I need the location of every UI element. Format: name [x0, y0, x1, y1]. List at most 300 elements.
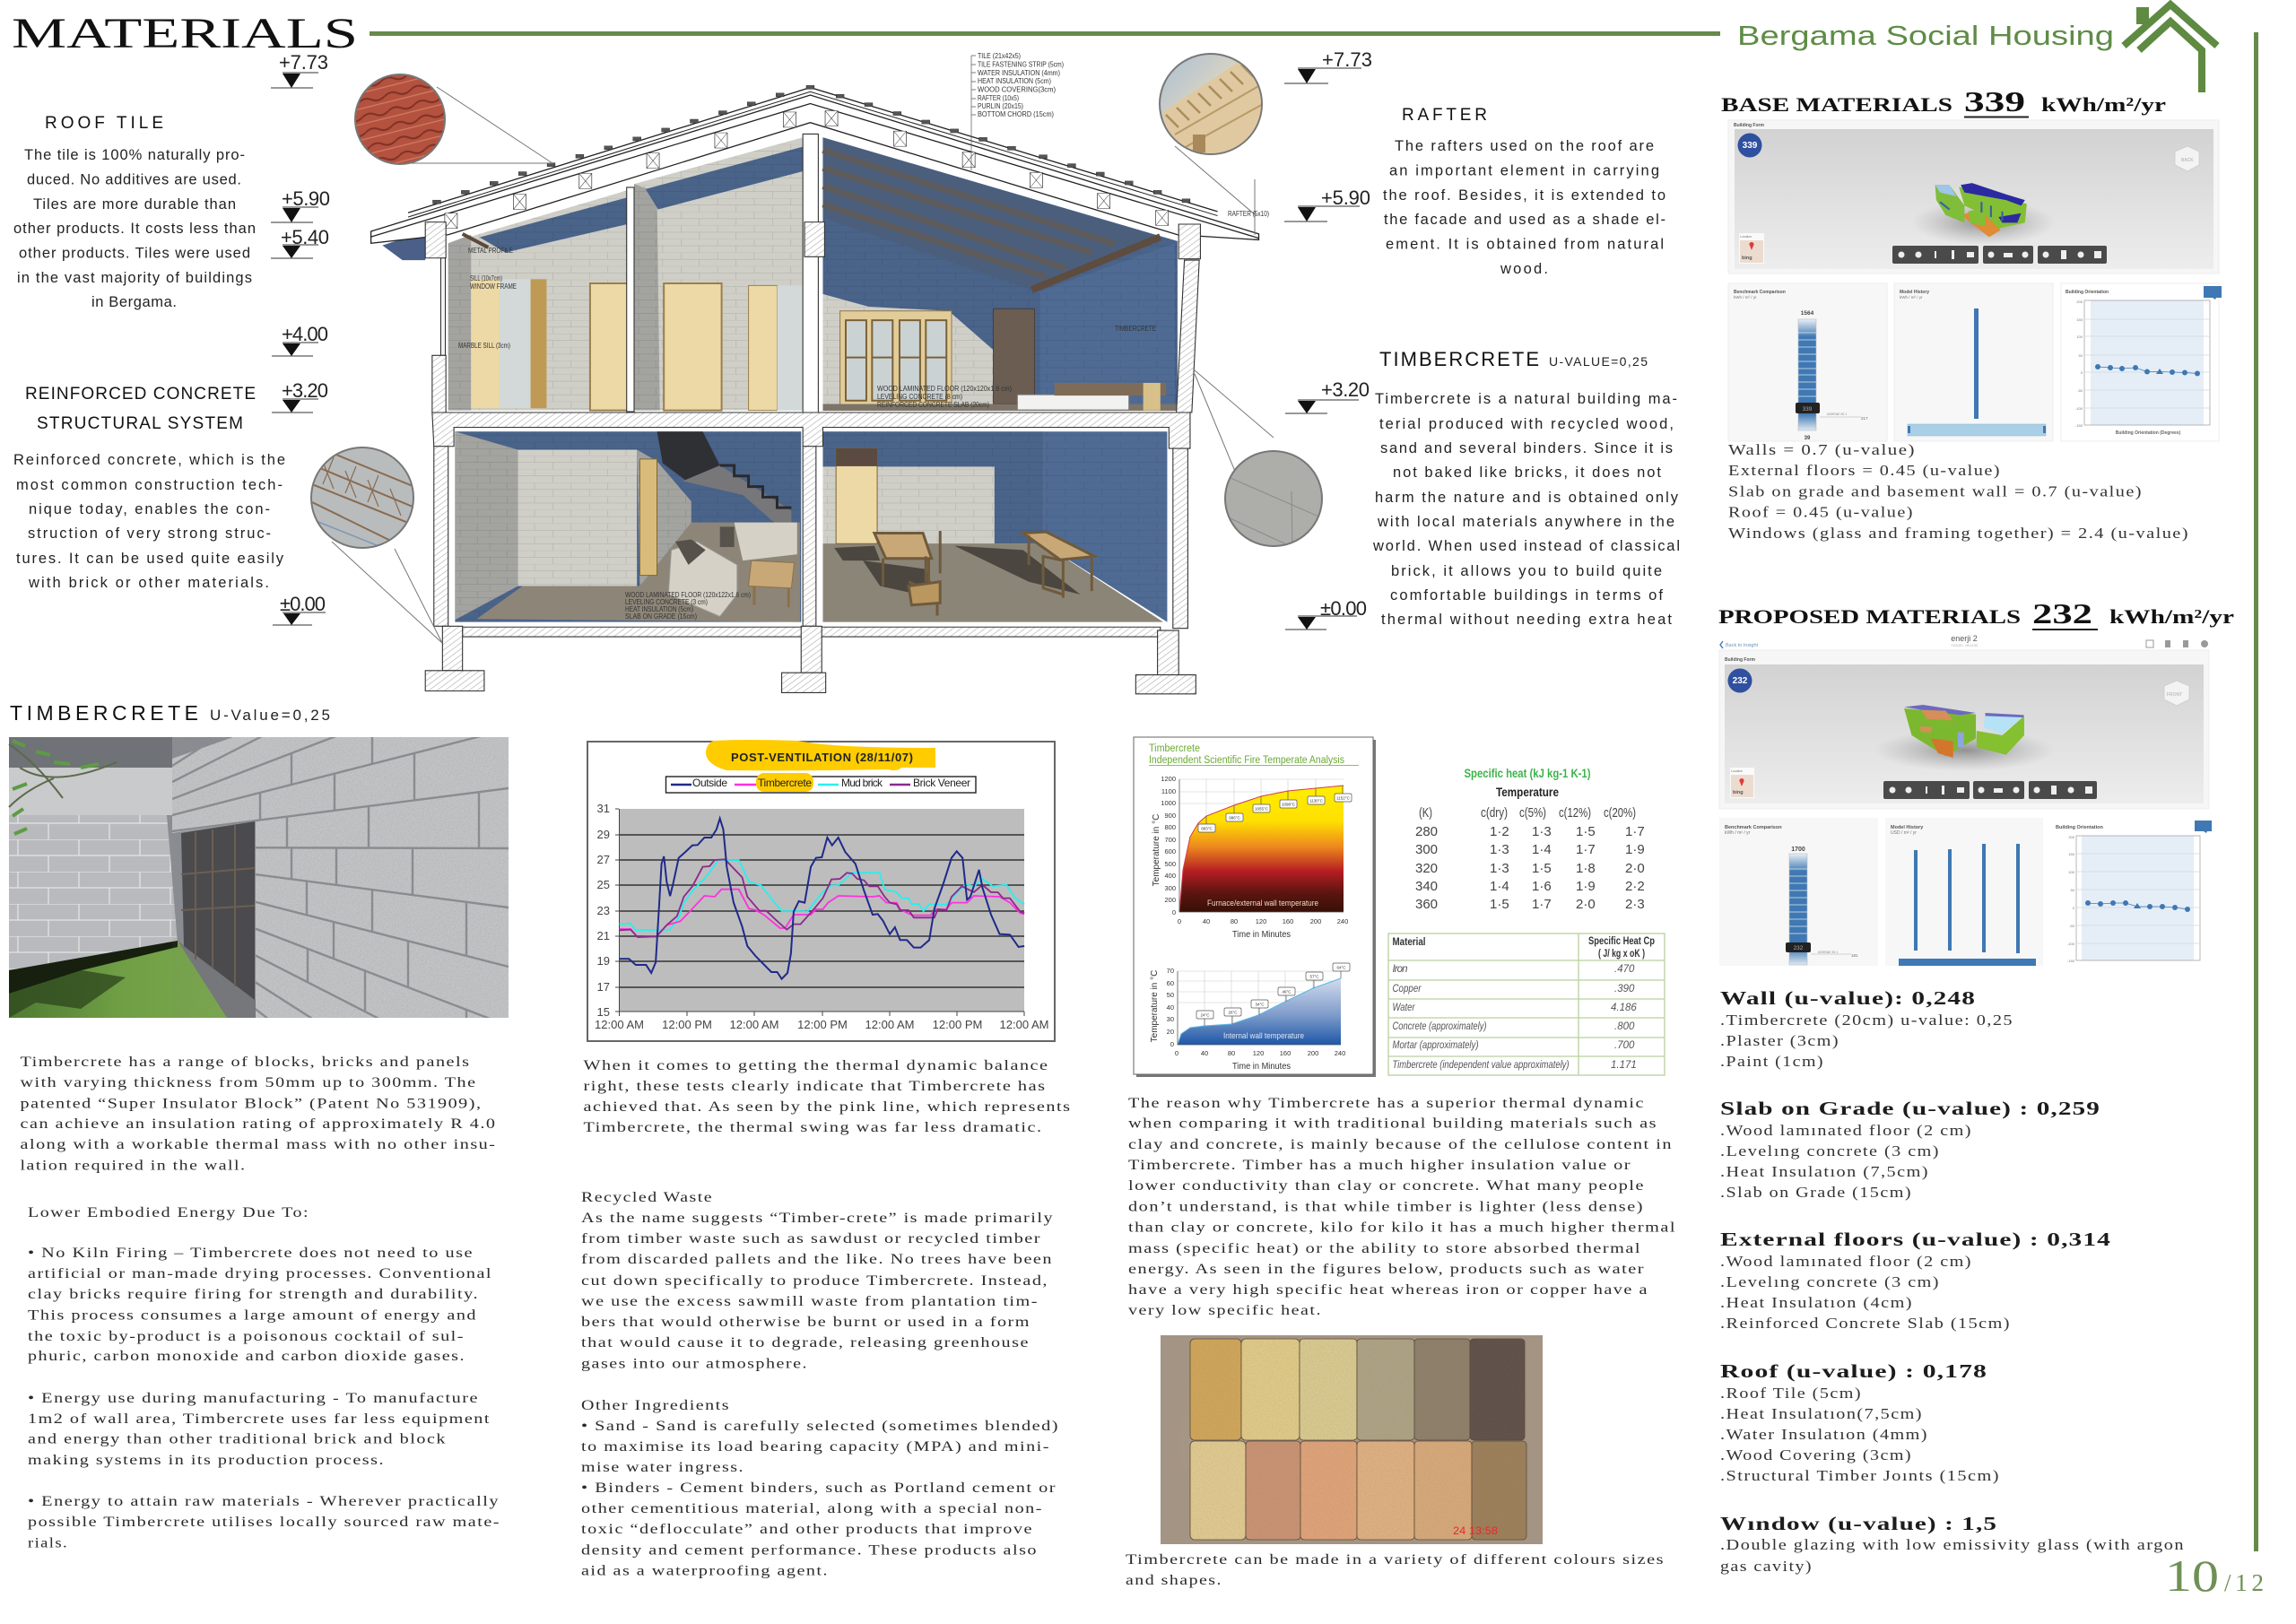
window notes: [458, 247, 517, 350]
chart: furnace temperature: 800: [1164, 823, 1176, 831]
level +5.90 right: [1284, 187, 1370, 221]
location map: Location: [1740, 235, 1752, 239]
chart: internal wall temperature: 240: [1335, 1049, 1345, 1057]
text block: why timbercrete has superior thermal dynamic: [1128, 1096, 1676, 1318]
table: specific heat by temperature: 1·3: [1490, 861, 1509, 876]
timbercrete note: TIMBERCRETE: [1115, 325, 1156, 333]
spec: window: gas cavity): [1720, 1558, 1813, 1575]
text block: rafter: an important element in carrying: [1389, 163, 1659, 179]
table: specific heat by temperature: 280: [1415, 824, 1438, 839]
table: specific heat of materials: .470: [1614, 964, 1635, 975]
3D building model: [1874, 705, 2055, 771]
upper right room: [822, 137, 1178, 411]
text block: reinforced concrete structural system: Reinforced concrete, which is the: [13, 452, 285, 468]
table: specific heat by temperature: 2·3: [1625, 897, 1645, 912]
table: specific heat by temperature: c(12%): [1559, 805, 1591, 821]
text block: other ingredients: • Binders - Cement binders, such as Portland cement or: [581, 1481, 1057, 1496]
y axis labels: 31: [597, 802, 610, 815]
text block: roof tile: other products. Tiles were used: [19, 246, 250, 262]
text block: lower embodied energy: • Energy use during manufacturing - To manufacture: [28, 1391, 479, 1406]
text block: recycled waste: from discarded pallets and the like. No trees have been: [581, 1252, 1053, 1267]
card: benchmark comparison: kWh / m² / yr: [1734, 295, 1757, 300]
detail circle: rafter: [1160, 54, 1266, 157]
roof layers list: HEAT INSULATION (5cm): [978, 77, 1051, 85]
location map: [1739, 233, 1764, 264]
text block: base u-values: [1728, 441, 2189, 542]
surface speckle: [1190, 1339, 1526, 1540]
upper floor layers: [877, 385, 1012, 409]
chart: internal wall temperature: 160: [1280, 1049, 1291, 1057]
chart: internal wall temperature: Temperature in °C: [1150, 970, 1160, 1042]
panel heading: Independent Scientific Fire Temperate Analysis: [1149, 755, 1344, 766]
x axis labels: 12:00 PM: [797, 1018, 848, 1031]
text block: reinforced concrete structural system: nique today, enables the con-: [29, 501, 270, 517]
level +5.90: [271, 187, 330, 222]
chart legend: Brick Veneer: [913, 777, 970, 789]
card: benchmark comparison: 217: [1861, 416, 1868, 421]
level +3.20 right: +3.20: [1321, 378, 1370, 401]
heading: reinforced concrete: STRUCTURAL SYSTEM: [37, 414, 243, 433]
viewer top bar: Back to Insight: [1726, 643, 1759, 648]
card: building orientation: 0: [2073, 906, 2075, 910]
table: specific heat by temperature: 1·7: [1625, 824, 1645, 839]
y axis labels: 27: [597, 853, 610, 866]
text block: reinforced concrete structural system: with brick or other materials.: [28, 575, 269, 591]
text block: lower embodied energy: [28, 1205, 500, 1551]
text block: timbercrete range: patented “Super Insulator Block” (Patent No 531909),: [20, 1096, 483, 1112]
chart: furnace temperature: 200: [1310, 917, 1321, 925]
table: specific heat by temperature: 1·5: [1576, 824, 1596, 839]
building form viewer: Building Form: [1725, 657, 1755, 663]
text block: why timbercrete has superior thermal dynamic: lower conductivity than clay or concrete. What many people: [1128, 1178, 1645, 1194]
chart: internal wall temperature: [1150, 963, 1350, 1072]
spec: roof: Roof (u-value) : 0,178: [1720, 1360, 1987, 1382]
text block: why timbercrete has superior thermal dynamic: Timbercrete. Timber has a much higher insulation value or: [1128, 1158, 1631, 1173]
heading: base materials 339: BASE MATERIALS: [1721, 93, 1952, 116]
detail circle: roof tile: [355, 74, 445, 164]
heading: rafter: RAFTER: [1402, 106, 1487, 125]
spec: slab on grade: .Wood lamınated floor (2 cm): [1720, 1122, 1972, 1139]
table: specific heat by temperature: (K): [1419, 805, 1432, 821]
text block: rafter: wood.: [1500, 261, 1548, 277]
y axis labels: 15: [597, 1005, 610, 1019]
chart: furnace temperature: Furnace/external wall temperature: [1207, 899, 1318, 908]
text block: roof tile: in the vast majority of buildings: [17, 270, 252, 286]
window notes: MARBLE SILL (3cm): [458, 342, 510, 350]
spec: external floors: [1720, 1229, 2111, 1332]
text block: why timbercrete has superior thermal dynamic: don’t understand, is that while timber is lighter (less dense): [1128, 1200, 1644, 1214]
text block: roof tile: [13, 114, 256, 310]
callouts: 1152°C: [1336, 796, 1351, 800]
table: specific heat of materials: [1388, 934, 1665, 1075]
chart: furnace temperature: Time in Minutes: [1232, 930, 1291, 940]
spec: slab on grade: Slab on Grade (u-value) : 0,259: [1720, 1098, 2100, 1119]
sofas and coffee table: [668, 523, 797, 616]
y axis labels: 21: [597, 929, 610, 942]
text block: reinforced concrete structural system: most common construction tech-: [16, 477, 283, 493]
spec: roof: .Roof Tile (5cm): [1720, 1385, 1862, 1402]
chart title highlight: [706, 740, 935, 770]
chart series: [620, 819, 1024, 979]
level +5.40: +5.40: [281, 226, 329, 248]
spec: wall: .Paint (1cm): [1720, 1053, 1824, 1070]
chart legend: Outside: [692, 777, 727, 789]
ground floor layers: HEAT INSULATION (5cm): [625, 605, 693, 613]
text block: recycled waste: we use the excess sawmill waste from plantation tim-: [581, 1294, 1039, 1309]
title: Materials: MATERIALS: [12, 10, 358, 57]
text block: timbercrete description: sand and several binders. Since it is: [1380, 440, 1673, 456]
text block: base u-values: Windows (glass and framing together) = 2.4 (u-value): [1728, 525, 2189, 542]
spec: external floors: .Reinforced Concrete Slab (15cm): [1720, 1315, 2011, 1332]
card: benchmark comparison: Benchmark Comparison: [1734, 290, 1786, 295]
card: model history: [1894, 283, 2053, 441]
level +3.20: +3.20: [282, 379, 328, 402]
table: specific heat by temperature: 1·7: [1532, 897, 1552, 912]
detail circle: reinforced concrete: [311, 447, 413, 556]
card: building orientation: -150: [2067, 959, 2075, 963]
chart: furnace temperature: 0: [1172, 908, 1176, 916]
rafter note: RAFTER (5x10): [1228, 210, 1269, 218]
text block: lower embodied energy: This process consumes a large amount of energy and: [28, 1307, 477, 1324]
text block: timbercrete description: world. When used instead of classical: [1372, 538, 1680, 554]
spec: roof: .Structural Timber Joınts (15cm): [1720, 1467, 2000, 1484]
text block: recycled waste: bers that would otherwise be burnt or used in a form: [581, 1315, 1031, 1330]
callouts: 24°C: [1200, 1013, 1210, 1017]
callouts: [1196, 963, 1350, 1026]
photo: timbercrete colour samples: [1161, 1335, 1543, 1544]
text block: other ingredients: density and cement performance. These products also: [581, 1542, 1038, 1559]
spec: roof: .Wood Covering (3cm): [1720, 1446, 1912, 1463]
table: specific heat by temperature: 320: [1415, 861, 1438, 876]
card: building orientation: 200: [2076, 300, 2083, 304]
text block: rafter: the facade and used as a shade el-: [1384, 212, 1665, 228]
card: model history: USD / m² / yr: [1891, 830, 1917, 836]
line chart: post-ventilation temperatures: [587, 740, 1055, 1041]
house section drawing: [371, 85, 1258, 694]
text block: other ingredients: • Sand - Sand is carefully selected (sometimes blended): [581, 1419, 1059, 1434]
chart: internal wall temperature: 0: [1175, 1049, 1178, 1057]
card: building orientation: [2051, 818, 2212, 966]
card: building orientation: 50: [2071, 888, 2075, 892]
text block: lower embodied energy: possible Timbercrete utilises locally sourced raw mate-: [28, 1515, 500, 1530]
photo caption: Timbercrete can be made in a variety of different colours sizes: [1126, 1552, 1665, 1568]
text block: timbercrete range: with varying thickness from 50mm up to 300mm. The: [20, 1075, 477, 1090]
heading: proposed materials 232: PROPOSED MATERIALS: [1718, 605, 2021, 628]
text block: timbercrete description: terial produced with recycled wood,: [1379, 416, 1674, 432]
photo: timbercrete colour samples: 24 13:58: [1453, 1524, 1498, 1537]
table: specific heat by temperature: 1·6: [1532, 879, 1552, 894]
level 0.00: ±0.00: [280, 593, 326, 615]
photo caption: and shapes.: [1126, 1573, 1222, 1588]
level +7.73 right: +7.73: [1322, 48, 1372, 71]
card: model history: Model History: [1900, 290, 1929, 295]
3D building model: [1911, 183, 2055, 246]
table: specific heat by temperature: 2·2: [1625, 879, 1645, 894]
heading: timbercrete u-value: U-Value=0,25: [210, 707, 330, 724]
project name: Bergama Social Housing: Bergama Social Housing: [1737, 20, 2114, 51]
card: benchmark comparison: [1719, 818, 1878, 966]
text block: timbercrete description: comfortable buildings in terms of: [1390, 587, 1663, 604]
table: specific heat of materials: Mortar (approximately): [1392, 1040, 1479, 1051]
card: benchmark comparison: Benchmark Comparison: [1725, 825, 1782, 830]
x axis labels: 12:00 AM: [730, 1018, 778, 1031]
text block: lower embodied energy: 1m2 of wall area, Timbercrete uses far less equipment: [28, 1411, 491, 1427]
chart legend: Mud brick: [841, 777, 883, 789]
table: specific heat by temperature: c(dry): [1481, 805, 1508, 821]
text block: base u-values: Walls = 0.7 (u-value): [1728, 441, 1916, 458]
upper middle room: [634, 137, 803, 411]
text block: other ingredients: Other Ingredients: [581, 1398, 730, 1413]
text block: lower embodied energy: • No Kiln Firing – Timbercrete does not need to use: [28, 1246, 474, 1261]
text block: other ingredients: toxic “deflocculate” and other products that improve: [581, 1522, 1033, 1537]
table: specific heat by temperature: 1·5: [1532, 861, 1552, 876]
chart: internal wall temperature: 120: [1253, 1049, 1264, 1057]
card: model history: Model History: [1891, 825, 1924, 830]
leader lines to detail circles: [332, 87, 1274, 643]
chart: internal wall temperature: 0: [1170, 1040, 1174, 1048]
chart: furnace temperature: 80: [1231, 917, 1238, 925]
upper floor layers: LEVELING CONCRETE (8 cm): [877, 393, 962, 401]
text block: other ingredients: other cementitious material, along with a special non-: [581, 1501, 1043, 1516]
text block: timbercrete description: harm the nature and is obtained only: [1375, 490, 1679, 506]
text block: base u-values: External floors = 0.45 (u-value): [1728, 462, 2001, 479]
chart: furnace temperature: 120: [1256, 917, 1266, 925]
text block: lower embodied energy: rials.: [28, 1535, 68, 1551]
text block: recycled waste: gases into our atmosphere.: [581, 1356, 808, 1372]
table: specific heat of materials: 1.171: [1611, 1060, 1637, 1071]
table: specific heat of materials: ( J/ kg x oK ): [1598, 949, 1645, 960]
table: specific heat of materials: 4.186: [1611, 1003, 1637, 1013]
chart: furnace temperature: 240: [1337, 917, 1348, 925]
heading: timbercrete u-value: [1379, 348, 1648, 370]
level +5.90: +5.90: [282, 187, 330, 210]
upper floor layers: REINFORCED CONCRETE SLAB (20cm): [877, 401, 989, 409]
heading: timbercrete u-value: U-VALUE=0,25: [1549, 354, 1648, 369]
table: specific heat by temperature: 1·9: [1625, 842, 1645, 857]
viewer top bar: [1720, 634, 2208, 648]
level +3.20 right: [1285, 378, 1370, 413]
table: specific heat by temperature: 2·0: [1625, 861, 1645, 876]
view cube: BACK: [2181, 158, 2194, 163]
callouts: 34°C: [1255, 1003, 1265, 1006]
chart: internal wall temperature: 60: [1167, 979, 1174, 987]
table: specific heat of materials: Iron: [1392, 964, 1408, 975]
text block: other ingredients: aid as a waterproofing agent.: [581, 1564, 829, 1578]
tree branches: [9, 741, 117, 834]
text block: roof tile: in Bergama.: [91, 294, 177, 310]
photo: timbercrete wall render: [8, 737, 509, 1018]
chart: internal wall temperature: 200: [1308, 1049, 1318, 1057]
spec: wall: [1720, 987, 2013, 1070]
spec: roof: [1720, 1360, 2000, 1484]
card: model history: kWh / m² / yr: [1900, 295, 1923, 300]
chart: internal wall temperature: Internal wall temperature: [1223, 1031, 1304, 1040]
text block: why timbercrete has superior thermal dynamic: clay and concrete, is mainly because of the cellulose content in: [1128, 1137, 1673, 1152]
chart: furnace temperature: 500: [1164, 860, 1176, 868]
table: specific heat of materials: Specific Heat Cp: [1588, 936, 1655, 947]
table: specific heat by temperature: 1·4: [1490, 879, 1509, 894]
roof layers list: RAFTER (10x5): [978, 94, 1019, 102]
text block: timbercrete range: along with a workable thermal mass with no other insu-: [20, 1137, 497, 1152]
panel: proposed model energy dashboard: [1719, 634, 2212, 966]
text block: recycled waste: that would cause it to degrade, releasing greenhouse: [581, 1335, 1030, 1350]
panel heading: Timbercrete: [1149, 743, 1200, 754]
chart: furnace temperature: [1152, 775, 1352, 940]
table: specific heat by temperature: 1·8: [1576, 861, 1596, 876]
callouts: 64°C: [1336, 965, 1346, 970]
callouts: 57°C: [1309, 974, 1319, 979]
chart: internal wall temperature: 40: [1201, 1049, 1208, 1057]
y axis labels: 23: [597, 904, 610, 917]
text block: timbercrete range: lation required in the wall.: [20, 1159, 246, 1173]
text block: why timbercrete has superior thermal dynamic: energy. As seen in the figures below, products such as water: [1128, 1262, 1645, 1277]
level 0.00 right: ±0.00: [1320, 597, 1367, 620]
text block: other ingredients: mise water ingress.: [581, 1460, 744, 1475]
x axis labels: 12:00 AM: [865, 1018, 914, 1031]
heading: timbercrete u-value: [10, 701, 330, 725]
text block: rafter: [1383, 106, 1665, 277]
brick joints: [172, 737, 509, 1018]
text block: thermal dynamic balance: right, these tests clearly indicate that Timbercrete has: [583, 1079, 1046, 1094]
text block: roof tile: The tile is 100% naturally pro-: [24, 147, 245, 163]
card: building orientation: -150: [2075, 423, 2083, 428]
panel heading: [1149, 743, 1359, 766]
spec: wall: .Plaster (3cm): [1720, 1032, 1839, 1049]
spec: slab on grade: .Levelıng concrete (3 cm): [1720, 1142, 1940, 1159]
chart: furnace temperature: 1200: [1161, 775, 1176, 783]
callouts: 26°C: [1228, 1010, 1238, 1015]
table: specific heat by temperature: c(5%): [1519, 805, 1546, 821]
viewer toolbar: [1883, 781, 2097, 799]
text block: base u-values: Slab on grade and basement wall = 0.7 (u-value): [1728, 482, 2143, 500]
y axis labels: [597, 802, 610, 1019]
text block: why timbercrete has superior thermal dynamic: have a very high specific heat whereas iron or copper have a: [1128, 1282, 1648, 1298]
heading: reinforced concrete: REINFORCED CONCRETE: [25, 385, 256, 404]
callouts: 1055°C: [1255, 807, 1269, 811]
card: benchmark comparison: 1700: [1791, 847, 1805, 853]
text block: timbercrete range: Timbercrete has a range of blocks, bricks and panels: [20, 1055, 470, 1070]
chart: furnace temperature: 700: [1164, 836, 1176, 844]
table: specific heat by temperature: 2·0: [1576, 897, 1596, 912]
spec: roof: .Water Insulatıon (4mm): [1720, 1426, 1928, 1443]
page number: 10: [2165, 1550, 2219, 1601]
text block: lower embodied energy: clay bricks require firing for strength and durability.: [28, 1287, 479, 1302]
spec: external floors: .Heat Insulatıon (4cm): [1720, 1294, 1913, 1311]
chart: furnace temperature: 40: [1203, 917, 1210, 925]
ground floor layers: [625, 591, 751, 621]
callouts: 1098°C: [1282, 802, 1296, 807]
card: benchmark comparison: 181: [1851, 953, 1858, 958]
structure: walls, slabs and footings: [425, 134, 1200, 694]
table: specific heat by temperature: 1·9: [1576, 879, 1596, 894]
text block: why timbercrete has superior thermal dynamic: mass (specific heat) or the ability to store absorbed thermal: [1128, 1241, 1641, 1256]
chart: furnace temperature: 300: [1164, 884, 1176, 892]
ground floor layers: SLAB ON GRADE (15cm): [625, 612, 697, 621]
card: building orientation: 150: [2068, 852, 2075, 856]
text block: why timbercrete has superior thermal dynamic: than clay or concrete, kilo for kilo it has a much higher thermal: [1128, 1220, 1676, 1236]
energy badge: [1738, 133, 1761, 158]
text block: rafter: the roof. Besides, it is extended to: [1383, 187, 1665, 204]
roof layers list: TILE FASTENING STRIP (5cm): [978, 61, 1064, 68]
text block: recycled waste: cut down specifically to produce Timbercrete. Instead,: [581, 1273, 1048, 1289]
text block: reinforced concrete structural system: [13, 385, 285, 591]
x axis labels: 12:00 AM: [595, 1018, 644, 1031]
roof layers list: PURLIN (20x15): [978, 102, 1023, 110]
card: benchmark comparison: ASHRAE 90.1: [1818, 951, 1838, 954]
heading: timbercrete u-value: TIMBERCRETE: [1379, 348, 1539, 370]
text block: roof tile: duced. No additives are used.: [27, 172, 241, 188]
text block: recycled waste: As the name suggests “Timber-crete” is made primarily: [581, 1211, 1054, 1226]
spec: external floors: .Wood lamınated floor (2 cm): [1720, 1253, 1972, 1270]
x axis labels: 12:00 AM: [1000, 1018, 1048, 1031]
header rule: [370, 31, 1720, 36]
level markers: right: [1284, 48, 1372, 630]
location map: Location: [1731, 769, 1743, 773]
chart: furnace temperature: 1100: [1161, 787, 1176, 795]
card: building orientation: 100: [2068, 870, 2075, 874]
view cube: FRONT: [2167, 692, 2182, 698]
level +7.73: +7.73: [279, 51, 328, 74]
card: building orientation: Building Orientation: [2066, 290, 2109, 295]
table: specific heat by temperature: 360: [1415, 897, 1438, 912]
card: building orientation: 200: [2068, 835, 2075, 839]
text block: timbercrete description: brick, it allows you to build quite: [1391, 563, 1662, 579]
building form viewer: [1728, 120, 2219, 274]
chart: furnace temperature: 1000: [1161, 799, 1176, 807]
location map: bing: [1742, 256, 1752, 261]
y axis labels: 19: [597, 954, 610, 968]
chart legend: [665, 773, 976, 793]
table: specific heat by temperature: 1·3: [1532, 824, 1552, 839]
text block: why timbercrete has superior thermal dynamic: The reason why Timbercrete has a superior thermal dynamic: [1128, 1096, 1645, 1111]
chart: internal wall temperature: 40: [1167, 1003, 1174, 1012]
text block: other ingredients: [581, 1398, 1059, 1578]
roof layers list: [971, 52, 1064, 170]
card: model history: [1885, 818, 2043, 966]
page number: [2165, 1550, 2264, 1601]
card: benchmark comparison: 1564: [1801, 310, 1814, 317]
heading: timbercrete u-value: TIMBERCRETE: [10, 701, 198, 725]
text block: lower embodied energy: phuric, carbon monoxide and carbon dioxide gases.: [28, 1349, 465, 1364]
x axis labels: 12:00 PM: [933, 1018, 982, 1031]
text block: reinforced concrete structural system: tures. It can be used quite easily: [16, 551, 284, 567]
spec: window: [1720, 1513, 2185, 1575]
table: specific heat of materials: .700: [1614, 1040, 1635, 1051]
y axis labels: 17: [597, 980, 610, 994]
heading: base materials 339: [1721, 85, 2166, 118]
window notes: SILL (10x7cm): [470, 274, 502, 282]
callouts: 46°C: [1282, 990, 1292, 994]
heading: roof tile: ROOF TILE: [45, 114, 163, 133]
card: benchmark comparison: 339: [1803, 406, 1813, 413]
spec: wall: Wall (u-value): 0,248: [1720, 987, 1976, 1009]
building form viewer: [1719, 650, 2209, 809]
detail circle: timbercrete panel: [1224, 451, 1323, 549]
chart: furnace temperature: 0: [1178, 917, 1181, 925]
text block: thermal dynamic balance: [583, 1058, 1071, 1135]
window notes: WINDOW FRAME: [470, 282, 517, 291]
text block: roof tile: Tiles are more durable than: [33, 196, 236, 213]
upper floor layers: WOOD LAMINATED FLOOR (120x120x1.6 cm): [877, 385, 1012, 393]
left eave soffit shadow: [382, 231, 425, 260]
level markers: left: [271, 51, 330, 625]
roof layers list: WOOD COVERING(3cm): [978, 86, 1056, 93]
x axis labels: 12:00 PM: [662, 1018, 712, 1031]
text block: timbercrete description: Timbercrete is a natural building ma-: [1375, 391, 1677, 407]
building form viewer: Building Form: [1734, 123, 1764, 128]
text block: lower embodied energy: making systems in its production process.: [28, 1453, 385, 1468]
window notes: METAL PROFILE: [468, 247, 513, 255]
